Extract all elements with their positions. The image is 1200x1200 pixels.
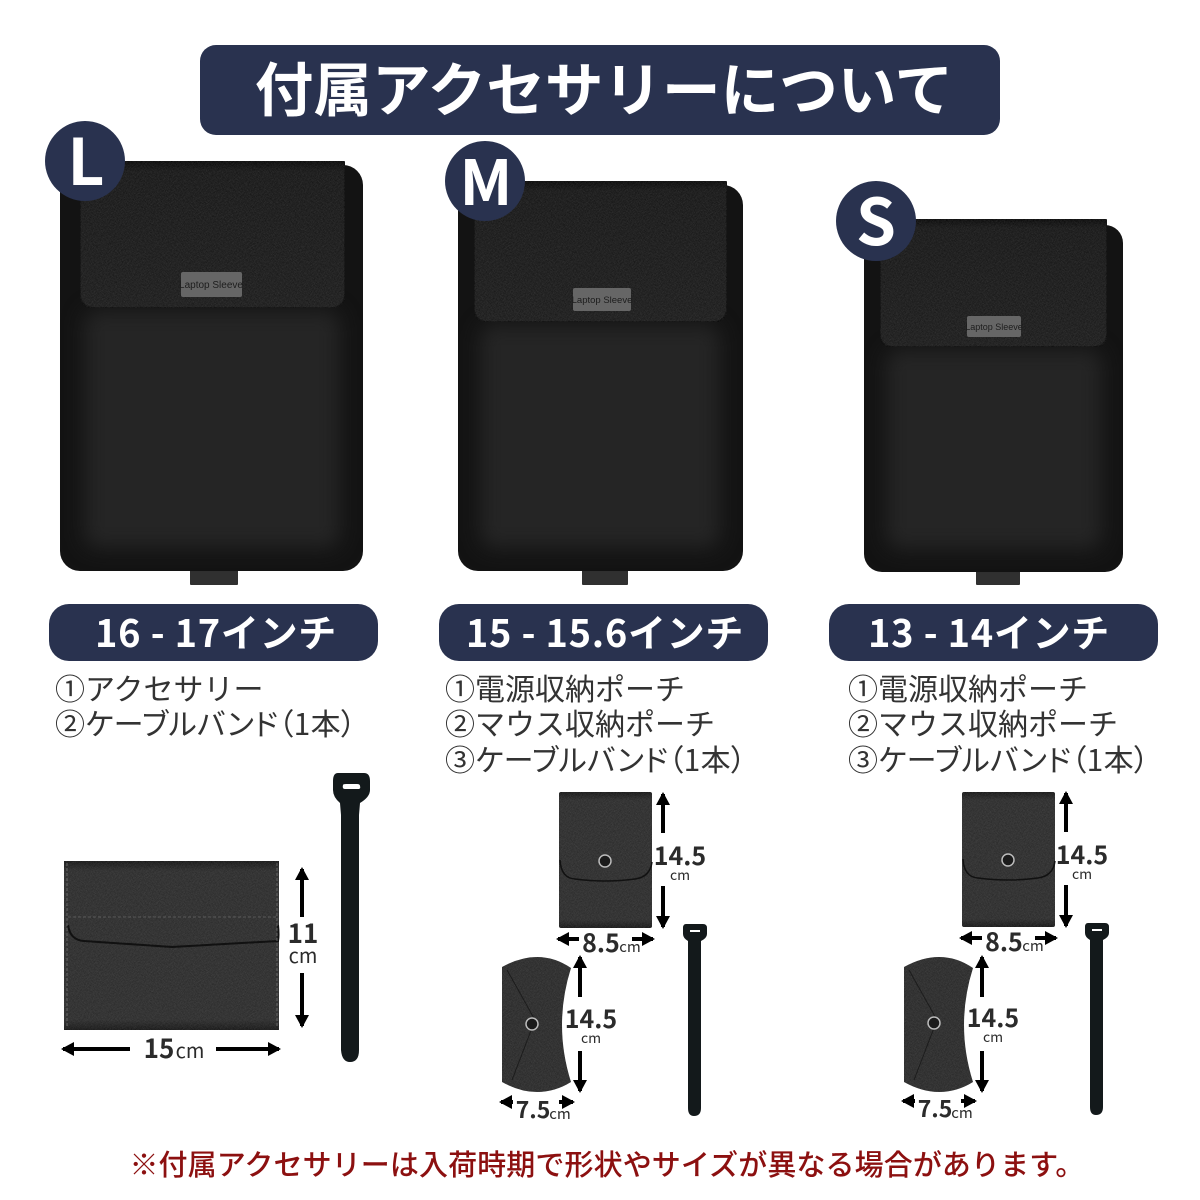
size label L: 16 - 17インチ <box>95 603 337 658</box>
sleeve S body <box>864 219 1123 585</box>
dimension 14.5 cm: cm <box>1072 864 1092 884</box>
badge S: S <box>856 172 896 264</box>
badge L: L <box>68 112 104 204</box>
badge S <box>836 172 916 264</box>
dimension 14.5 cm second <box>565 957 617 1091</box>
panel: size M sleeve <box>445 133 743 585</box>
dimension 7.5 cm: cm <box>549 1103 571 1124</box>
dimension 7.5 cm <box>501 1091 573 1125</box>
accessory list L: ②ケーブルバンド（1本） <box>55 700 356 744</box>
dimension 15 cm <box>63 1029 279 1066</box>
accessory list M: ③ケーブルバンド（1本） <box>445 736 746 780</box>
dimension 14.5 cm <box>1056 793 1108 926</box>
title: 付属アクセサリーについて <box>255 43 953 128</box>
accessory list S: ①電源収納ポーチ <box>848 665 1088 709</box>
accessory pouch L with dimensions <box>63 861 318 1066</box>
cable band S <box>1085 923 1109 1115</box>
dimension 8.5 cm: cm <box>619 936 641 957</box>
dimension 11 cm: cm <box>289 940 317 969</box>
cable band L <box>333 773 370 1062</box>
accessory list L <box>55 665 356 744</box>
accessory pouches M <box>501 792 707 1125</box>
accessory list L: ①アクセサリー <box>55 665 264 709</box>
panel: size S sleeve <box>836 172 1123 585</box>
dimension 14.5 cm: cm <box>670 865 690 885</box>
sleeve M body <box>458 181 743 585</box>
badge L <box>45 112 125 204</box>
sleeve M body: Laptop Sleeve <box>572 295 632 306</box>
footnote: ※付属アクセサリーは入荷時期で形状やサイズが異なる場合があります。 <box>129 1142 1085 1184</box>
accessory list M <box>445 665 746 780</box>
size label S: 13 - 14インチ <box>868 603 1110 658</box>
dimension 15 cm: 15 <box>144 1029 174 1066</box>
mouse pouch S <box>904 957 973 1092</box>
dimension 7.5 cm: 7.5 <box>516 1091 550 1125</box>
badge M: M <box>460 133 512 223</box>
size label L <box>49 603 378 661</box>
badge M <box>445 133 525 223</box>
accessory list M: ①電源収納ポーチ <box>445 665 685 709</box>
mouse pouch M <box>502 957 571 1092</box>
panel: size L sleeve <box>45 112 363 585</box>
power pouch M <box>559 792 652 928</box>
dimension 7.5 cm: 7.5 <box>918 1090 952 1124</box>
dimension 8.5 cm: 8.5 <box>582 924 620 960</box>
size label M: 15 - 15.6インチ <box>466 603 744 658</box>
dimension 14.5 cm second: cm <box>581 1028 601 1048</box>
dimension 11 cm <box>288 869 318 1026</box>
dimension 11 cm: 11 <box>288 914 318 951</box>
sleeve S body: Laptop Sleeve <box>965 322 1023 332</box>
dimension 8.5 cm <box>961 923 1056 959</box>
dimension 7.5 cm: cm <box>951 1102 973 1123</box>
sleeve L body: Laptop Sleeve <box>179 280 243 291</box>
accessory list S: ③ケーブルバンド（1本） <box>848 736 1149 780</box>
dimension 8.5 cm: cm <box>1022 935 1044 956</box>
dimension 8.5 cm: 8.5 <box>985 923 1023 959</box>
cable band M <box>683 924 707 1116</box>
accessory list S <box>848 665 1149 780</box>
dimension 14.5 cm second: 14.5 <box>967 999 1019 1035</box>
dimension 14.5 cm second <box>967 957 1019 1091</box>
pouch L <box>64 861 279 1030</box>
dimension 14.5 cm: 14.5 <box>1056 836 1108 872</box>
accessory pouches S <box>903 792 1109 1124</box>
dimension 14.5 cm: 14.5 <box>654 837 706 873</box>
dimension 14.5 cm second: cm <box>983 1027 1003 1047</box>
dimension 14.5 cm <box>654 794 706 927</box>
dimension 8.5 cm <box>558 924 653 960</box>
accessory list S: ②マウス収納ポーチ <box>848 700 1118 744</box>
size label S <box>829 603 1158 661</box>
dimension 14.5 cm second: 14.5 <box>565 1000 617 1036</box>
dimension 15 cm: cm <box>176 1035 204 1064</box>
dimension 7.5 cm <box>903 1090 975 1124</box>
sleeve L body <box>60 161 363 585</box>
power pouch S <box>962 792 1055 927</box>
accessory list M: ②マウス収納ポーチ <box>445 700 715 744</box>
